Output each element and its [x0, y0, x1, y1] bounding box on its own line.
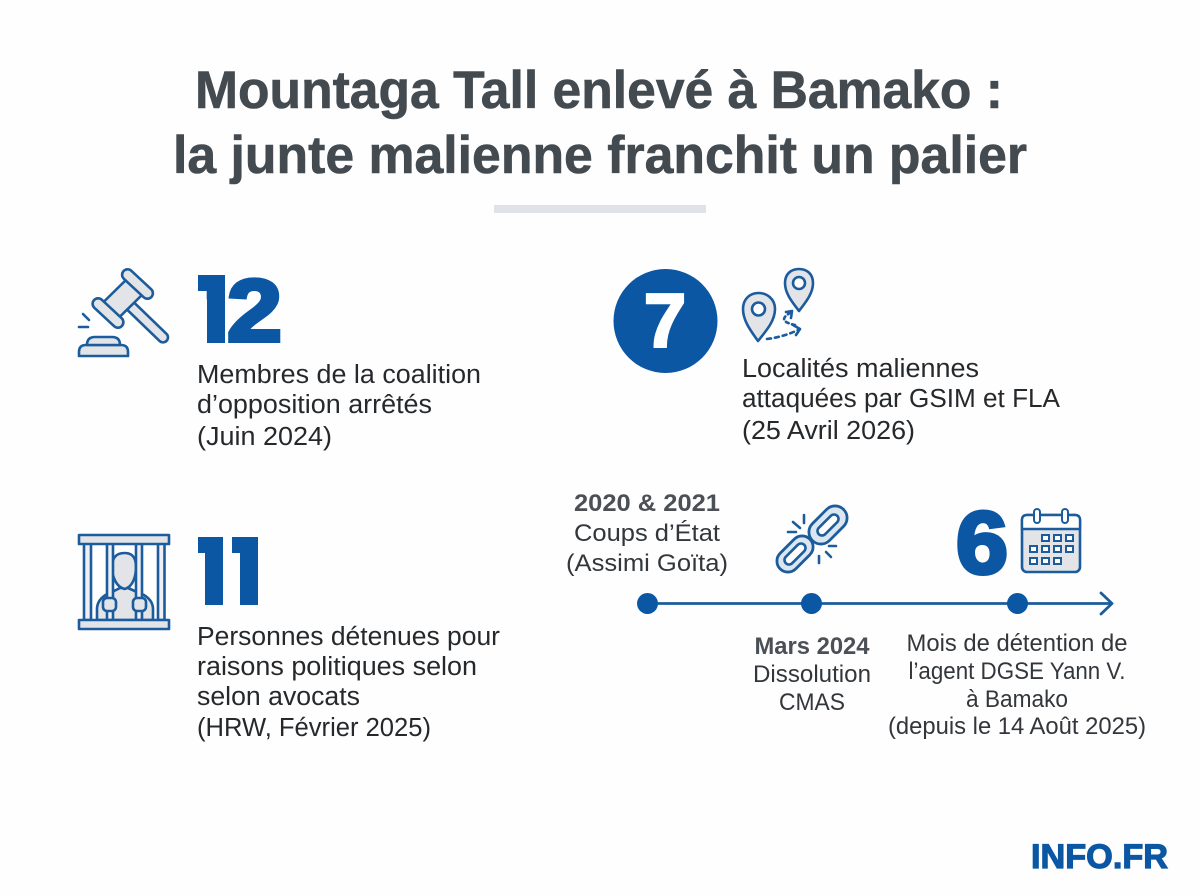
- icon: prisoner behind bars: [79, 535, 169, 629]
- text: political detainees: [197, 623, 501, 742]
- stat number: 12: 1: [204, 261, 226, 360]
- timeline label: DGSE agent: Mois de détention de: [906, 630, 1128, 657]
- stat number: 11: 1: [204, 523, 224, 622]
- text: political detainees: raisons politiques selon: [197, 653, 477, 681]
- timeline axis with arrow: [648, 593, 1112, 614]
- timeline label: CMAS: CMAS: [779, 689, 845, 716]
- timeline label: coups: 2020 & 2021: [574, 490, 720, 517]
- timeline label: CMAS: [753, 633, 871, 716]
- brand logo: INFO.FR: [1031, 838, 1168, 876]
- icon: gavel: [79, 267, 170, 356]
- timeline marker: 2025: [1007, 593, 1028, 614]
- timeline label: CMAS: Dissolution: [753, 661, 871, 688]
- timeline label: DGSE agent: à Bamako: [966, 686, 1068, 713]
- stat number: 12: [194, 261, 282, 360]
- stat badge: 7: 7: [644, 279, 686, 364]
- icon: map pins with arrows: [743, 269, 813, 341]
- timeline label: DGSE agent: [888, 630, 1146, 740]
- timeline marker: 2024: [801, 593, 822, 614]
- text: attacked localities: attaquées par GSIM et FLA: [742, 385, 1060, 413]
- timeline label: DGSE agent: l’agent DGSE Yann V.: [908, 658, 1126, 685]
- title: la junte malienne franchit un palier: [173, 126, 1027, 185]
- stat number: 11: [194, 523, 264, 622]
- text: attacked localities: Localités maliennes: [742, 355, 979, 383]
- stat number: 12: 2: [227, 261, 282, 360]
- text: attacked localities: [742, 355, 1060, 445]
- text: political detainees: selon avocats: [197, 683, 360, 711]
- text: coalition members: Membres de la coalition: [197, 361, 481, 389]
- text: political detainees: Personnes détenues pour: [197, 623, 501, 651]
- stat number: 11: 1: [239, 523, 259, 622]
- text: coalition members: [197, 361, 481, 451]
- title: [173, 61, 1027, 185]
- icon: broken chain: [772, 501, 852, 577]
- stat number: 6: 6: [956, 493, 1008, 592]
- text: coalition members: (Juin 2024): [197, 423, 332, 451]
- text: political detainees: (HRW, Février 2025): [197, 714, 431, 742]
- timeline label: DGSE agent: (depuis le 14 Août 2025): [888, 713, 1146, 740]
- timeline label: coups: [566, 490, 728, 577]
- timeline label: coups: (Assimi Goïta): [566, 550, 728, 577]
- text: attacked localities: (25 Avril 2026): [742, 417, 915, 445]
- text: coalition members: d’opposition arrêtés: [197, 391, 432, 419]
- icon: calendar: [1022, 509, 1080, 572]
- timeline label: CMAS: Mars 2024: [754, 633, 870, 660]
- timeline label: coups: Coups d’État: [574, 520, 720, 547]
- title: Mountaga Tall enlevé à Bamako :: [195, 61, 1003, 120]
- title divider: [494, 205, 706, 213]
- timeline marker: 2020: [637, 593, 658, 614]
- stat badge: 7: [614, 269, 718, 373]
